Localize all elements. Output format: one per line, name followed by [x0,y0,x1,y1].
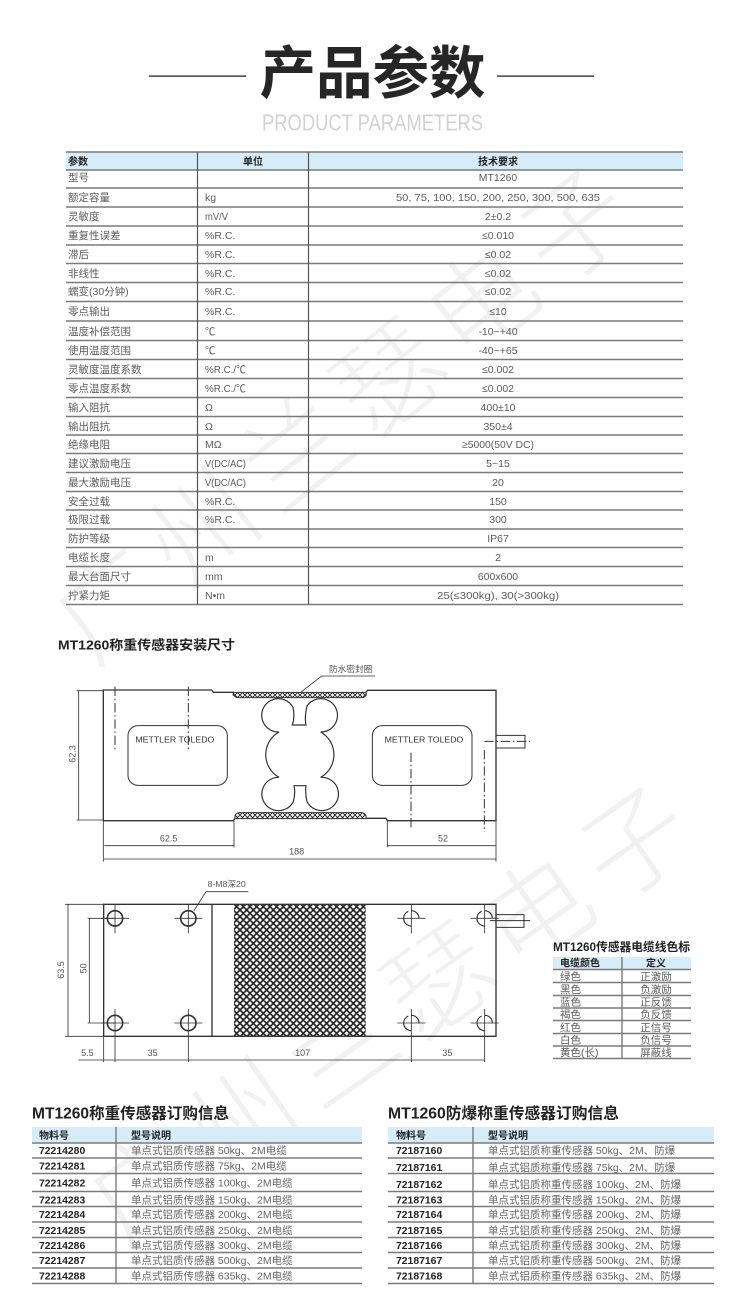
explosion-proof table rows: 72187162 [396,1180,442,1191]
table rows: 额定容量 [68,191,110,204]
watermark: 广州兰瑟电子 [14,119,672,693]
table rows: 拧紧力矩 [68,589,110,602]
explosion-proof table rows: 单点式铝质称重传感器 300kg、2M、防爆 [488,1239,682,1252]
thread callout [194,879,248,911]
table rows: 零点输出 [68,305,110,318]
cable table rows: 正激励 [640,970,672,983]
table rows: V(DC/AC) [205,458,246,470]
table rows: %R.C. [205,496,235,508]
order table title: MT1260称重传感器订购信息 [32,1104,229,1122]
table rows: 蠕变(30分钟) [68,285,129,298]
explosion-proof table rows: 72187167 [396,1256,442,1267]
cable table rows: 绿色 [560,970,581,983]
table rows: Ω [205,421,213,433]
explosion-proof table rows: 单点式铝质称重传感器 100kg、2M、防爆 [488,1178,682,1191]
explosion-proof table grid [388,1127,714,1284]
title rule left [149,76,246,77]
table rows: 300 [489,514,507,526]
cable table header: 定义 [646,956,666,970]
table rows: ≤0.002 [482,383,514,395]
dimension labels: 107 [295,1048,310,1058]
order table rows: 72214287 [39,1256,85,1267]
table rows: 输出阻抗 [68,420,110,433]
table rows: mm [205,571,223,583]
table rows: IP67 [487,533,509,545]
order table rows: 单点式铝质传感器 75kg、2M电缆 [131,1160,287,1172]
cable table rows: 正信号 [640,1022,672,1034]
left label window [128,726,227,785]
explosion-proof table title: MT1260防爆称重传感器订购信息 [388,1104,619,1122]
dimension labels: 188 [289,846,304,856]
brand text right: METTLER TOLEDO [385,735,464,745]
english subheading: PRODUCT PARAMETERS [262,110,483,136]
table rows: 2±0.2 [485,211,511,223]
dimension labels: 62.3 [67,745,77,763]
diagram: top view drawing [56,879,530,1062]
order table rows: 单点式铝质传感器 100kg、2M电缆 [131,1176,293,1190]
table rows: 灵敏度温度系数 [68,363,142,376]
table rows: MΩ [205,439,222,451]
order table rows: 单点式铝质传感器 150kg、2M电缆 [131,1194,293,1206]
table rows: 使用温度范围 [68,344,131,357]
order table header [32,1127,362,1143]
table rows: 输入阻抗 [68,401,110,414]
cable table rows: 负信号 [640,1034,672,1046]
explosion-proof table header: 型号说明 [488,1129,528,1142]
table rows: 600x600 [478,571,518,583]
table rows: 灵敏度 [68,210,100,223]
explosion-proof table rows: 单点式铝质称重传感器 250kg、2M、防爆 [488,1224,682,1237]
panel: explosion-proof order info table [388,1104,714,1284]
heading: installation dimensions: MT1260称重传感器安装尺寸 [58,638,235,652]
table rows: %R.C./℃ [205,383,246,395]
title [149,42,594,136]
explosion-proof table header: 物料号 [396,1129,426,1142]
seal callout [301,663,375,692]
table rows: 400±10 [481,402,516,414]
cable table rows: 褐色 [560,1008,581,1021]
flexure cutout [262,699,338,811]
watermark: 广州兰瑟电子 [51,735,730,1276]
dimension labels [67,745,448,856]
cable table rows: 蓝色 [560,996,581,1008]
panel: order info table [32,1104,362,1284]
dimension labels: 63.5 [56,961,66,979]
explosion-proof table rows: 72187168 [396,1272,442,1282]
mounting holes left [101,904,202,1036]
order table grid [32,1127,362,1284]
order table rows: 单点式铝质传感器 200kg、2M电缆 [131,1208,293,1221]
table rows: 电缆长度 [68,551,110,564]
table rows: -10~+40 [478,326,518,338]
order table header: 型号说明 [131,1129,171,1142]
order table rows: 单点式铝质传感器 250kg、2M电缆 [131,1224,293,1237]
table rows: 型号 [68,171,89,184]
hatched load area [234,904,366,1036]
table rows: ≤10 [489,306,507,318]
explosion-proof table rows: 72187164 [396,1210,442,1221]
table rows: 50, 75, 100, 150, 200, 250, 300, 500, 635 [396,192,600,204]
mounting holes right [397,904,499,1036]
cable table header [553,956,691,970]
diagram: side view drawing [67,663,530,862]
cable table rows: 黄色(长) [560,1046,598,1059]
cable table grid [553,957,691,1058]
dimension labels: 35 [148,1048,158,1058]
table header: 单位 [243,155,263,168]
explosion-proof table rows: 72187161 [396,1163,442,1174]
table rows: 350±4 [483,421,513,433]
center lines [115,687,530,832]
thread callout: 8-M8深20 [208,879,246,889]
order table rows: 单点式铝质传感器 500kg、2M电缆 [131,1254,293,1267]
explosion-proof table rows: 单点式铝质称重传感器 500kg、2M、防爆 [488,1254,682,1267]
table rows: %R.C. [205,286,235,298]
order table rows: 72214282 [39,1178,85,1190]
sensor body outline [103,690,496,821]
cable table rows [560,970,672,1059]
table rows: mV/V [205,211,228,223]
table rows: MT1260 [479,172,517,184]
explosion-proof table rows: 72187165 [396,1226,442,1237]
table grid [66,152,683,604]
order table rows: 72214283 [39,1196,85,1206]
explosion-proof table rows: 单点式铝质称重传感器 75kg、2M、防爆 [488,1161,676,1174]
dimension lines [65,904,485,1062]
dimension labels: 5.5 [81,1048,94,1058]
table rows: ≤0.02 [485,249,511,261]
title rule right [497,76,594,77]
explosion-proof table rows [396,1144,682,1282]
order table rows [39,1144,293,1282]
cable table rows: 白色 [560,1034,581,1046]
explosion-proof table rows: 72187160 [396,1146,442,1157]
table rows: 建议激励电压 [68,457,131,470]
table rows: %R.C. [205,514,235,526]
cable stub [496,735,525,748]
panel: parameters table [66,152,683,604]
table rows: 25(≤300kg), 30(>300kg) [437,590,559,602]
cable table rows: 屏蔽线 [640,1046,672,1059]
table rows: 安全过载 [68,495,110,508]
dimension labels: 62.5 [160,834,177,844]
cable table rows: 正反馈 [640,996,672,1008]
table rows: ≤0.002 [482,364,514,376]
table header: 技术要求 [478,155,518,168]
table rows: 零点温度系数 [68,382,131,395]
cable table header: 电缆颜色 [560,956,600,970]
table rows: V(DC/AC) [205,477,246,489]
dimension labels: 35 [442,1048,452,1058]
table rows: 2 [495,552,501,564]
table rows: ℃ [205,345,216,357]
table rows: 滞后 [68,249,89,261]
explosion-proof table rows: 单点式铝质称重传感器 635kg、2M、防爆 [488,1270,682,1282]
table rows: ≤0.02 [485,268,511,280]
order table rows: 72214280 [39,1146,85,1157]
seal callout: 防水密封圈 [329,663,372,674]
order table rows: 72214286 [39,1241,85,1252]
cable table rows: 红色 [560,1021,581,1034]
cable table rows: 负反馈 [640,1008,672,1021]
table rows: 5~15 [486,458,510,470]
dimension labels: 50 [79,963,89,973]
dimension labels [56,961,452,1058]
table rows: ℃ [205,326,216,338]
table rows [68,171,600,602]
table header: 参数 [68,155,88,168]
explosion-proof table rows: 72187163 [396,1196,442,1206]
brand text left: METTLER TOLEDO [135,735,215,745]
order table rows: 72214288 [39,1272,85,1282]
table rows: %R.C. [205,268,235,280]
table rows: Ω [205,402,213,414]
explosion-proof table rows: 单点式铝质称重传感器 150kg、2M、防爆 [488,1194,682,1206]
cable stub [490,915,530,927]
table rows: 最大激励电压 [68,476,131,489]
explosion-proof table rows: 单点式铝质称重传感器 50kg、2M、防爆 [488,1144,676,1157]
seal band bottom [235,813,366,819]
table rows: 绝缘电阻 [68,438,110,451]
table rows: ≤0.010 [482,230,514,242]
table rows: 150 [489,496,507,508]
explosion-proof table header [388,1127,714,1143]
plate outline [104,904,496,1036]
main heading: 产品参数 [260,42,486,106]
explosion-proof table rows: 72187166 [396,1241,442,1252]
order table rows: 单点式铝质传感器 300kg、2M电缆 [131,1239,293,1252]
table rows: %R.C. [205,306,235,318]
order table rows: 单点式铝质传感器 50kg、2M电缆 [131,1144,287,1157]
right label window [372,726,472,785]
table rows: %R.C./℃ [205,364,246,376]
order table rows: 72214281 [39,1162,85,1172]
table header [66,152,683,170]
table rows: 重复性误差 [68,229,120,242]
table rows: m [205,552,214,564]
explosion-proof table rows: 单点式铝质称重传感器 200kg、2M、防爆 [488,1208,682,1221]
order table header: 物料号 [39,1129,69,1142]
table rows: N•m [205,590,225,602]
table rows: %R.C. [205,230,235,242]
table rows: 非线性 [68,267,100,280]
table rows: -40~+65 [478,345,518,357]
table rows: 防护等级 [68,532,110,545]
table rows: %R.C. [205,249,235,261]
seal band top [233,692,366,698]
table rows: 极限过载 [68,513,110,526]
table rows: 最大台面尺寸 [68,570,131,583]
dimension lines [77,691,496,862]
dimension labels: 52 [438,834,448,844]
table rows: 20 [492,477,504,489]
table rows: kg [205,192,216,204]
table rows: ≥5000(50V DC) [462,439,534,451]
cable table rows: 负激励 [640,983,672,996]
order table rows: 单点式铝质传感器 635kg、2M电缆 [131,1270,293,1282]
order table rows: 72214284 [39,1210,85,1221]
cable table rows: 黑色 [560,983,581,996]
table rows: ≤0.02 [485,286,511,298]
panel: cable colour table [553,940,691,1059]
cable table title: MT1260传感器电缆线色标 [553,940,690,954]
table rows: 温度补偿范围 [68,325,131,338]
order table rows: 72214285 [39,1226,85,1237]
